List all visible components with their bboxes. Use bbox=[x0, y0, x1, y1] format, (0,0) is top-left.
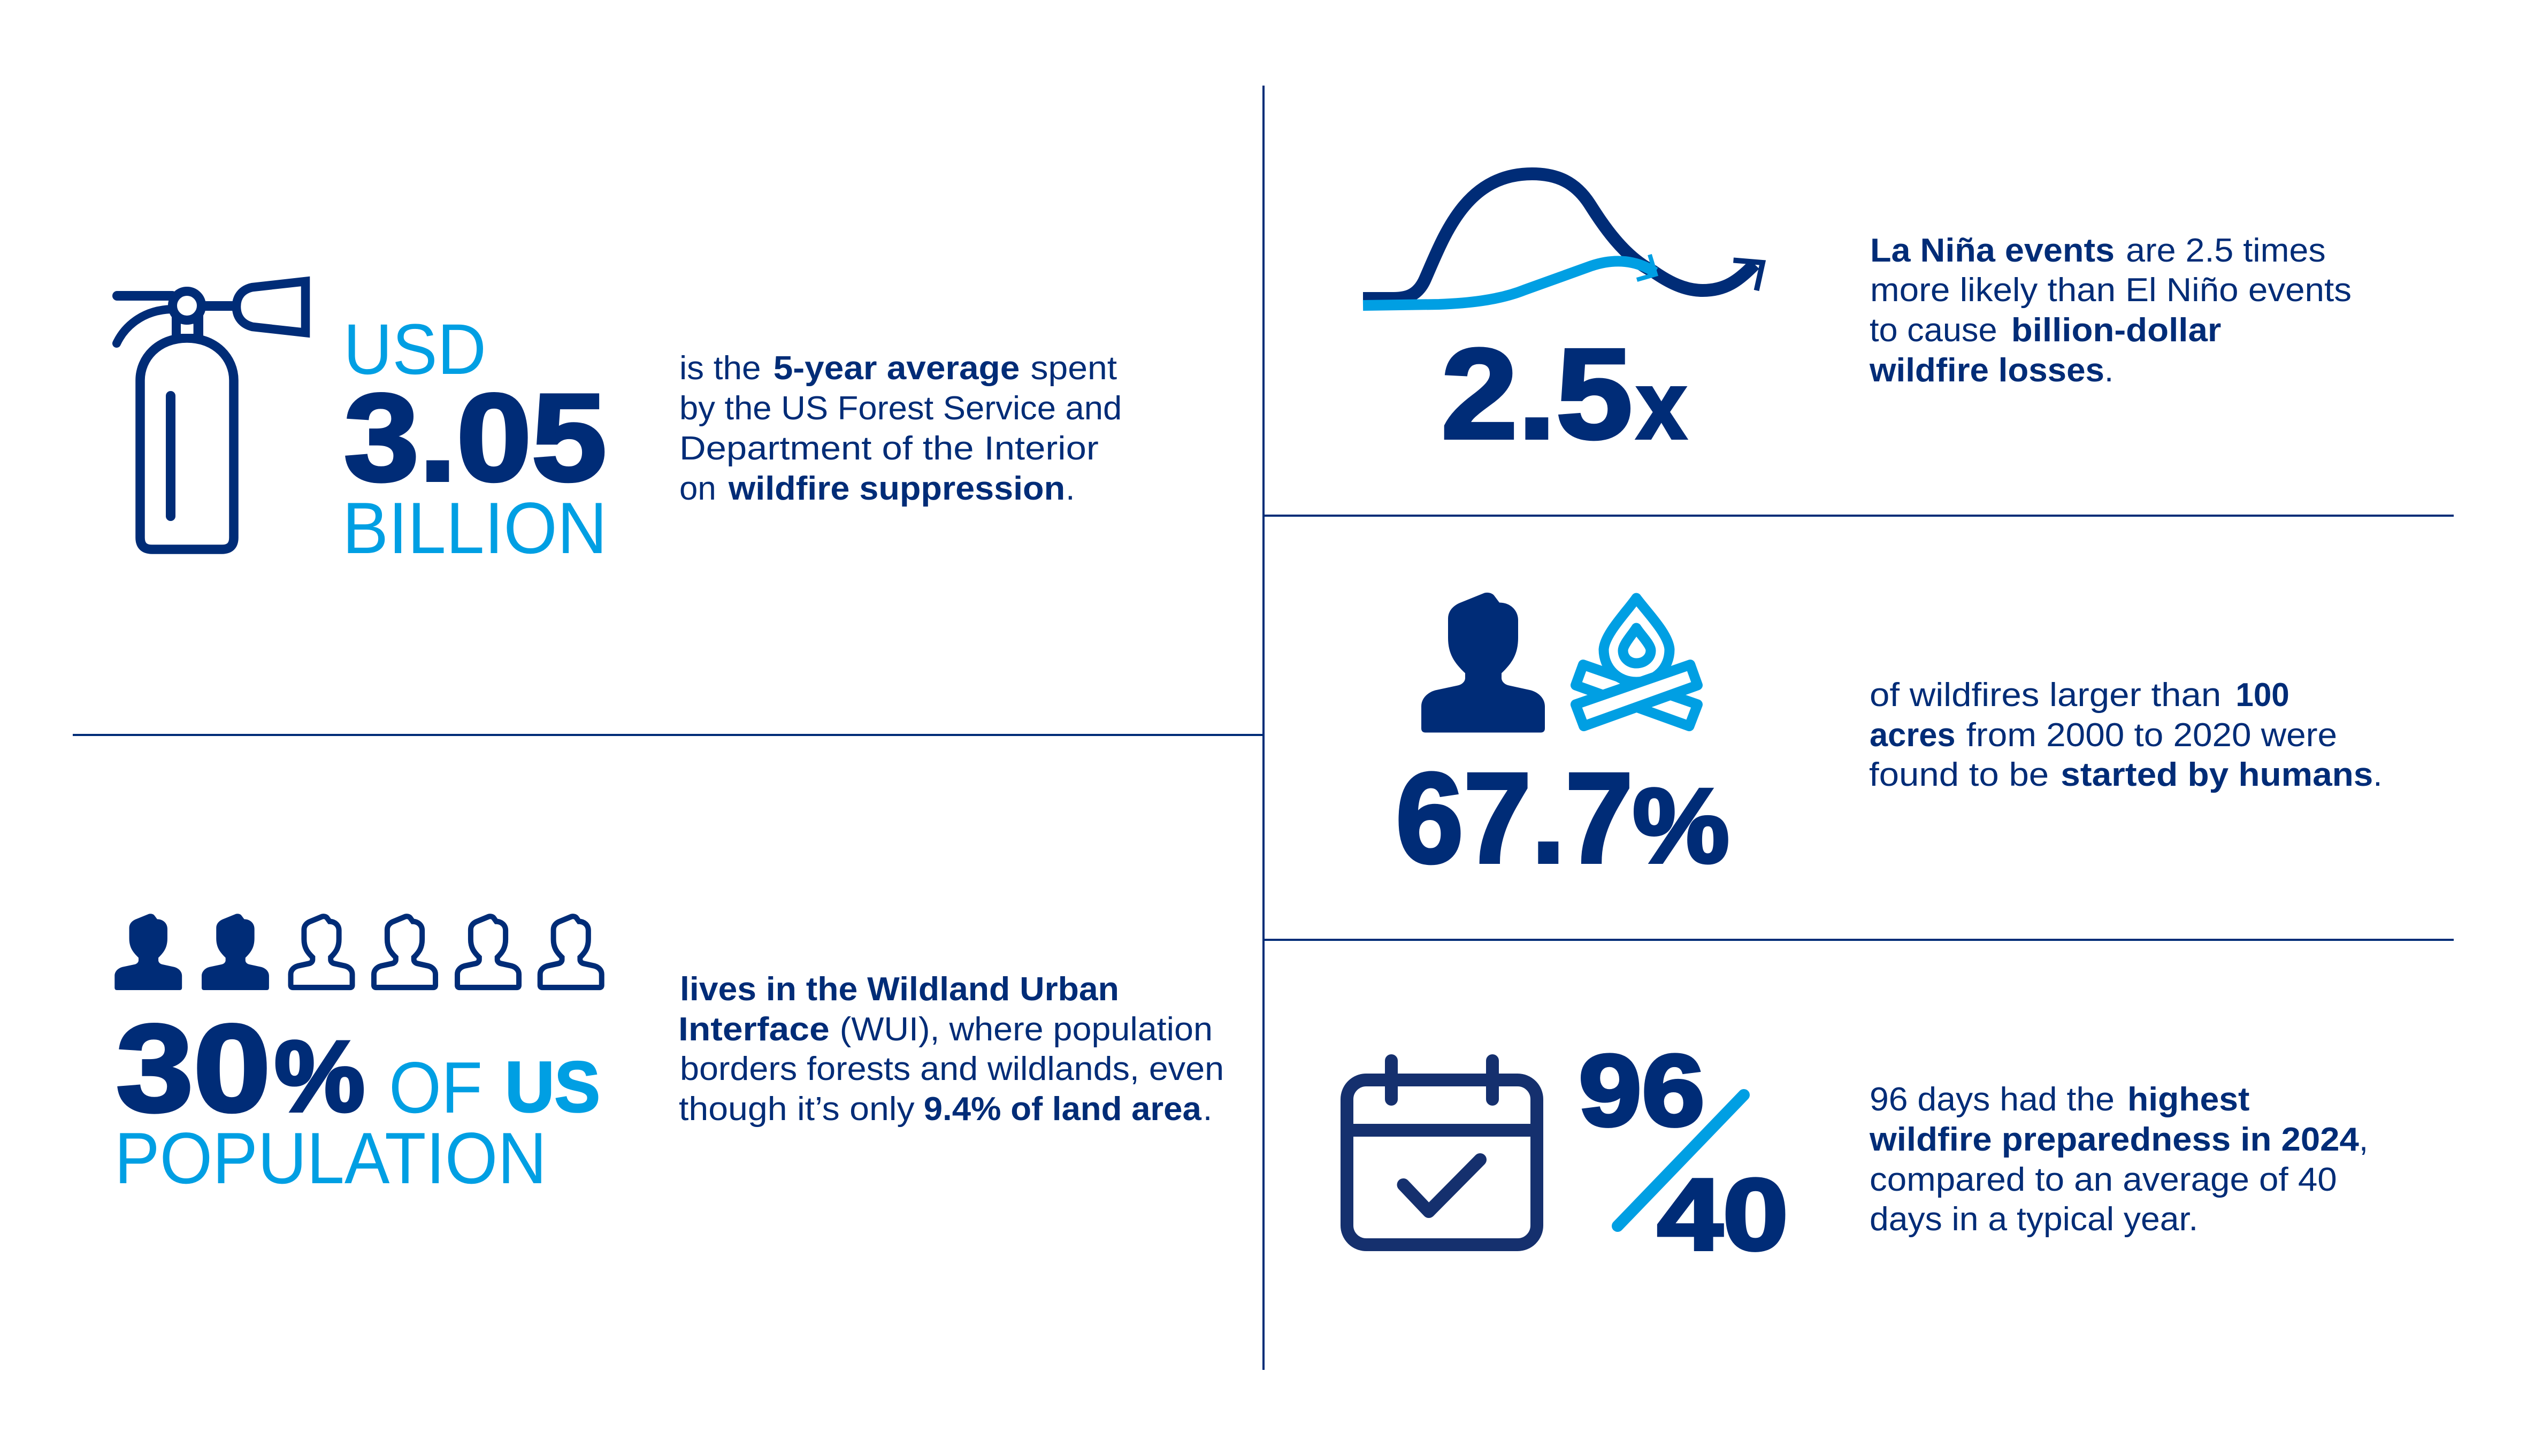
text: suppression description: on bbox=[679, 470, 716, 507]
text: human-caused description: . bbox=[2373, 756, 2383, 793]
text: WUI description: borders forests and wildlands, even bbox=[680, 1051, 1224, 1087]
icon row: six people, two filled bbox=[114, 914, 602, 990]
stat: 30% of US population bbox=[114, 999, 600, 1199]
icon: fire extinguisher bbox=[117, 281, 305, 549]
text: WUI description bbox=[678, 971, 1224, 1128]
text: preparedness description: highest bbox=[2127, 1081, 2249, 1118]
text: WUI description: though it’s only bbox=[679, 1091, 915, 1128]
stat: 96 over 40 bbox=[1579, 1034, 1788, 1271]
text: human-caused description: from 2000 to 2020 were bbox=[1966, 717, 2337, 754]
text: human-caused description: started by humans bbox=[2061, 756, 2373, 793]
icon: person silhouette bbox=[1421, 593, 1545, 733]
stat: USD 3.05 billion: 3.05 bbox=[344, 369, 607, 507]
panel: wildfire suppression spending bbox=[117, 281, 1122, 569]
text: La Nina description bbox=[1869, 232, 2352, 389]
stat: 30% of US population: POPULATION bbox=[114, 1117, 547, 1199]
text: suppression description: is the bbox=[679, 350, 761, 387]
text: La Nina description: La Niña events bbox=[1870, 232, 2115, 269]
text: suppression description: Department of the Interior bbox=[679, 430, 1099, 467]
text: WUI description: lives in the Wildland Urban bbox=[680, 971, 1119, 1008]
stat: 67.7%: 67.7 bbox=[1396, 746, 1633, 890]
icon: outline person 4 bbox=[374, 916, 435, 987]
text: preparedness description: 96 days had the bbox=[1870, 1081, 2115, 1118]
text: human-caused description: found to be bbox=[1869, 756, 2049, 793]
stat: 30% of US population: US bbox=[505, 1047, 600, 1127]
icon: filled person 1 bbox=[114, 914, 182, 990]
text: La Nina description: . bbox=[2104, 352, 2114, 389]
icon: outline person 3 bbox=[291, 916, 353, 987]
panel: population in the wildland urban interface bbox=[114, 914, 1224, 1199]
text: La Nina description: are 2.5 times bbox=[2126, 232, 2326, 269]
stat: 2.5x: x bbox=[1637, 352, 1686, 458]
stat: USD 3.05 billion bbox=[342, 310, 607, 569]
text: La Nina description: more likely than El Niño events bbox=[1870, 272, 2352, 309]
text: suppression description: . bbox=[1066, 470, 1075, 507]
text: preparedness description bbox=[1869, 1081, 2368, 1238]
stat: 30% of US population: 30 bbox=[116, 999, 271, 1138]
stat: 30% of US population: % bbox=[274, 1020, 365, 1132]
text: La Nina description: wildfire losses bbox=[1869, 352, 2104, 389]
text: suppression description: by the US Forest Service and bbox=[679, 390, 1122, 427]
text: preparedness description: compared to an average of 40 bbox=[1870, 1161, 2337, 1198]
stat: USD 3.05 billion: USD bbox=[343, 310, 486, 389]
stat: 30% of US population: OF bbox=[389, 1047, 483, 1128]
text: WUI description: . bbox=[1203, 1091, 1212, 1128]
text: suppression description: wildfire suppression bbox=[728, 470, 1065, 507]
stat: 96 over 40: 40 bbox=[1657, 1158, 1788, 1271]
panel: wildfire preparedness days bbox=[1347, 1034, 2368, 1271]
panel: human-caused wildfires bbox=[1396, 593, 2383, 890]
stat: 96 over 40: 96 bbox=[1579, 1034, 1705, 1147]
text: human-caused description bbox=[1869, 677, 2383, 793]
text: suppression description: spent bbox=[1030, 350, 1117, 387]
stat: 2.5x: 2.5 bbox=[1441, 322, 1633, 465]
icon: filled person 2 bbox=[202, 914, 269, 990]
panel: La Nina likelihood bbox=[1363, 174, 2352, 465]
text: WUI description: (WUI), where population bbox=[840, 1011, 1213, 1048]
stat: 67.7%: % bbox=[1633, 767, 1729, 885]
text: WUI description: 9.4% of land area bbox=[924, 1091, 1201, 1128]
icon: outline person 5 bbox=[457, 916, 519, 987]
text: preparedness description: wildfire preparedness in 2024 bbox=[1869, 1121, 2359, 1158]
text: WUI description: Interface bbox=[678, 1011, 830, 1048]
text: La Nina description: billion-dollar bbox=[2011, 312, 2221, 349]
icon: outline person 6 bbox=[540, 916, 602, 987]
icon: calendar with check mark bbox=[1347, 1061, 1537, 1245]
text: suppression description: 5-year average bbox=[774, 350, 1020, 387]
icon: campfire bbox=[1575, 598, 1698, 726]
chart: La Nina and El Nino curves bbox=[1363, 174, 1763, 305]
text: preparedness description: , bbox=[2359, 1121, 2368, 1158]
text: human-caused description: acres bbox=[1870, 717, 1956, 754]
text: La Nina description: to cause bbox=[1870, 312, 1997, 349]
text: suppression description bbox=[679, 350, 1122, 507]
stat: USD 3.05 billion: BILLION bbox=[342, 487, 607, 569]
text: preparedness description: days in a typical year. bbox=[1870, 1201, 2198, 1238]
text: human-caused description: 100 bbox=[2235, 677, 2289, 714]
text: human-caused description: of wildfires larger than bbox=[1870, 677, 2221, 714]
